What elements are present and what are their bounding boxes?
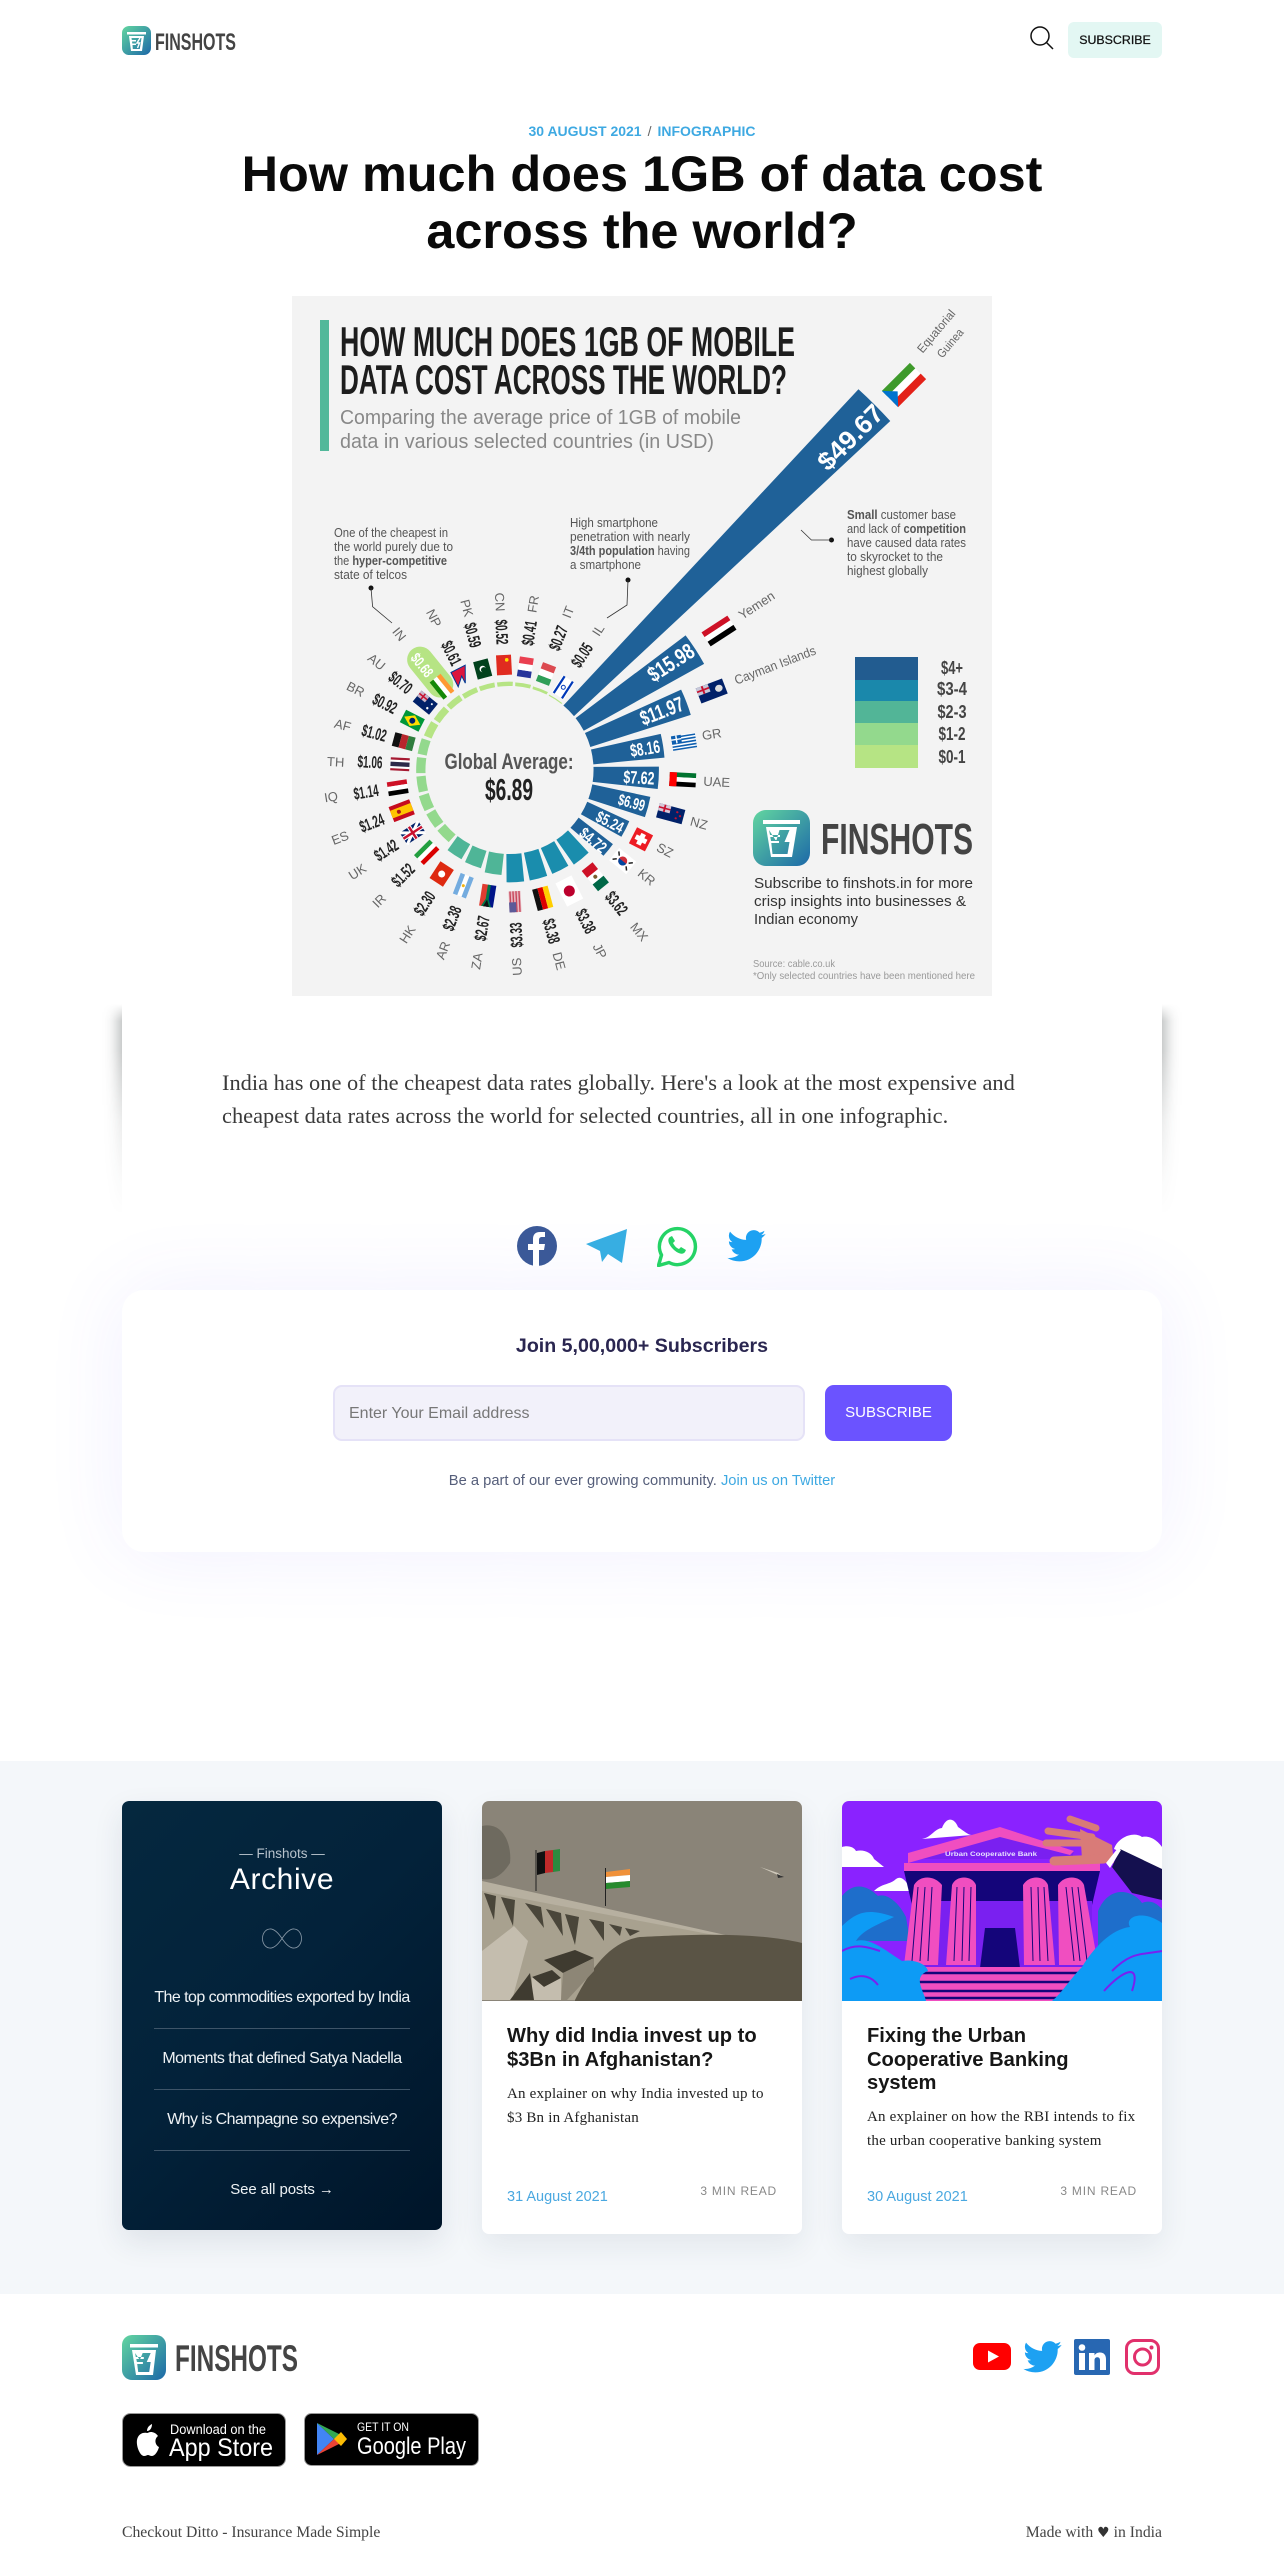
colour legend: $0-1 <box>938 747 966 767</box>
country values <box>352 619 631 948</box>
country labels: GR <box>701 725 723 743</box>
country labels: ES <box>329 828 351 848</box>
country labels: NZ <box>689 814 709 833</box>
article title: across the world? <box>426 202 858 259</box>
illustration: dam with flags <box>482 1801 802 2001</box>
country labels: UAE <box>703 774 731 790</box>
subscribe button <box>825 1385 952 1441</box>
infographic: cost of 1GB of mobile data <box>292 296 992 996</box>
country labels: Cayman Islands <box>732 643 818 688</box>
global average: Global Average: <box>444 749 574 774</box>
values inside bars: $49.67 <box>811 398 889 476</box>
article intro text: India has one of the cheapest data rates globally. Here's a look at the most expensive and <box>222 1070 1015 1095</box>
panel: archive card <box>122 1801 442 2230</box>
post summary <box>507 2086 764 2126</box>
colour legend: $4+ <box>941 658 963 678</box>
header subscribe button: SUBSCRIBE <box>1079 33 1151 47</box>
see all posts link: See all posts → <box>230 2181 334 2198</box>
archive heading: Archive <box>230 1863 334 1896</box>
footer left link: Checkout Ditto - Insurance Made Simple <box>122 2524 380 2541</box>
country labels: IT <box>559 604 577 620</box>
infographic source <box>753 958 975 982</box>
country values: $0.70 <box>385 668 416 698</box>
country labels: IR <box>369 891 389 911</box>
infographic subtitle: Comparing the average price of 1GB of mobile <box>340 407 741 429</box>
post title <box>507 2025 757 2070</box>
country values: $3.62 <box>601 888 631 919</box>
post summary: An explainer on why India invested up to <box>507 2086 764 2102</box>
values inside bars: $15.98 <box>643 638 699 687</box>
badge: app store: Download on the <box>170 2422 266 2437</box>
post meta date and tag: 30 AUGUST 2021 / INFOGRAPHIC <box>528 123 755 139</box>
post title: Fixing the Urban <box>867 2025 1026 2047</box>
badge: google play: GET IT ON <box>357 2420 409 2434</box>
subscribe button: SUBSCRIBE <box>845 1404 932 1421</box>
country labels: JP <box>590 941 610 961</box>
infographic subtitle: data in various selected countries (in USD) <box>340 431 714 453</box>
annotation: Israel: a smartphone <box>570 558 641 572</box>
country labels: AR <box>433 939 453 961</box>
country labels: SZ <box>654 840 676 861</box>
colour legend <box>855 657 967 768</box>
colour legend: $3-4 <box>937 679 967 699</box>
country labels: UK <box>346 860 369 883</box>
icon: instagram <box>1125 2339 1160 2375</box>
values inside bars: $7.62 <box>623 767 655 789</box>
annotation: India <box>334 526 453 623</box>
annotation: India: state of telcos <box>334 568 407 582</box>
icon: telegram <box>586 1229 627 1263</box>
annotation: Equatorial Guinea: Small customer base <box>847 508 956 522</box>
country labels <box>323 307 967 976</box>
archive list item 3: Why is Champagne so expensive? <box>167 2111 397 2128</box>
post summary: the urban cooperative banking system <box>867 2133 1102 2149</box>
country labels: PK <box>457 598 476 619</box>
country values: $1.02 <box>360 721 389 746</box>
country values: $0.92 <box>369 690 400 718</box>
infographic call to action <box>754 875 973 928</box>
infographic accent bar <box>320 320 329 451</box>
icon: twitter <box>728 1230 766 1262</box>
global average <box>444 749 574 807</box>
header logo <box>122 26 236 56</box>
country values: $1.14 <box>352 781 380 804</box>
country values: $0.52 <box>491 619 512 645</box>
country labels: ZA <box>468 951 486 970</box>
infographic call to action: Subscribe to finshots.in for more <box>754 875 973 892</box>
badge: google play <box>304 2413 479 2466</box>
icon: linkedin <box>1074 2339 1110 2375</box>
country labels: IL <box>589 621 607 639</box>
post summary: $3 Bn in Afghanistan <box>507 2110 639 2126</box>
email input <box>333 1385 805 1441</box>
annotation: Israel: penetration with nearly <box>570 530 691 544</box>
country labels: FR <box>524 594 542 614</box>
country values: $0.61 <box>437 638 465 669</box>
values inside bars: $0.68 <box>407 650 436 681</box>
archive list item 2: Moments that defined Satya Nadella <box>162 2050 402 2067</box>
country labels: DE <box>550 950 569 972</box>
article intro text <box>222 1070 1015 1128</box>
badge: app store: App Store <box>169 2434 273 2462</box>
country labels: IN <box>389 624 409 644</box>
country values: $0.27 <box>545 623 572 653</box>
post summary <box>867 2109 1135 2149</box>
country values: $2.67 <box>471 915 494 942</box>
annotation: India: the world purely due to <box>334 540 453 554</box>
radial bar chart <box>402 389 891 883</box>
post title <box>867 2025 1069 2094</box>
article intro text: cheapest data rates across the world for selected countries, all in one infographic. <box>222 1103 948 1128</box>
footer logo <box>122 2335 298 2380</box>
annotation: India: One of the cheapest in <box>334 526 448 540</box>
country labels: Equatorial <box>914 307 958 356</box>
annotation: Israel: 3/4th population having <box>570 544 690 558</box>
country values: $3.38 <box>539 917 564 946</box>
country values: $3.33 <box>506 922 527 948</box>
archive list item 1: The top commodities exported by India <box>154 1989 410 2006</box>
icon: infinity <box>262 1928 302 1948</box>
country labels: CN <box>492 592 508 612</box>
post title: Cooperative Banking <box>867 2048 1069 2070</box>
infographic subtitle <box>340 407 741 453</box>
email input: Enter Your Email address <box>349 1405 530 1422</box>
country values: $1.52 <box>388 860 419 891</box>
post title: Why did India invest up to <box>507 2025 757 2047</box>
values inside bars: $4.72 <box>576 825 610 857</box>
community note: Be a part of our ever growing community. Join us on Twitter <box>449 1473 835 1489</box>
illustration: cooperative bank building <box>842 1801 1162 2001</box>
illustration: cooperative bank building: Urban Cooperative Bank <box>945 1851 1037 1858</box>
search icon <box>1030 26 1054 50</box>
country labels: IQ <box>323 788 339 805</box>
global average: $6.89 <box>485 772 533 807</box>
archive kicker: — Finshots — <box>239 1846 325 1861</box>
country labels: KR <box>635 866 658 889</box>
country values: $2.38 <box>439 903 466 934</box>
values inside bars: $11.97 <box>637 693 687 730</box>
country values: $3.38 <box>571 906 600 937</box>
country labels: MX <box>627 920 651 944</box>
values inside bars <box>407 398 889 857</box>
country values: $2.30 <box>410 888 440 919</box>
post read time: 3 MIN READ <box>1060 2184 1137 2198</box>
post date: 31 August 2021 <box>507 2189 608 2205</box>
country labels: TH <box>327 754 345 770</box>
country labels: Guinea <box>934 325 967 361</box>
icon: twitter <box>1024 2341 1062 2372</box>
post date: 30 August 2021 <box>867 2189 968 2205</box>
article title <box>242 145 1042 259</box>
article title: How much does 1GB of data cost <box>242 145 1042 202</box>
colour legend: $1-2 <box>938 724 966 744</box>
country values: $0.41 <box>518 619 541 647</box>
country values: $1.06 <box>357 752 383 772</box>
values inside bars: $6.99 <box>616 792 647 815</box>
country values: $1.24 <box>357 810 387 837</box>
country flags <box>387 363 926 912</box>
post read time: 3 MIN READ <box>700 2184 777 2198</box>
subscribe heading: Join 5,00,000+ Subscribers <box>516 1335 768 1357</box>
panel: post card Afghanistan <box>482 1801 802 2234</box>
badge: app store <box>122 2413 286 2467</box>
country values: $0.05 <box>567 640 597 671</box>
country labels: BR <box>344 678 367 700</box>
annotation: India: the hyper-competitive <box>334 554 447 568</box>
icon: facebook <box>517 1226 557 1266</box>
infographic source: *Only selected countries have been mentioned here <box>753 970 975 982</box>
panel: article body <box>110 1007 1174 1164</box>
panel: post card Urban Cooperative Banking <box>842 1801 1162 2234</box>
annotation: Israel <box>570 516 691 618</box>
country labels: AF <box>333 716 353 735</box>
country labels: US <box>509 957 525 976</box>
country values: $1.42 <box>371 836 402 865</box>
annotation: Equatorial Guinea <box>801 508 966 578</box>
annotation: Equatorial Guinea: have caused data rates <box>847 536 966 550</box>
annotation: Equatorial Guinea: to skyrocket to the <box>847 550 943 564</box>
country labels: NP <box>423 607 445 630</box>
values inside bars: $5.24 <box>593 809 626 837</box>
post title: $3Bn in Afghanistan? <box>507 2048 713 2070</box>
header subscribe button <box>1068 22 1162 58</box>
annotation: Equatorial Guinea: highest globally <box>847 564 929 578</box>
colour legend: $2-3 <box>938 702 966 722</box>
panel: related posts section background <box>0 1761 1284 2294</box>
post summary: An explainer on how the RBI intends to fix <box>867 2109 1135 2125</box>
country labels: Yemen <box>736 588 777 622</box>
infographic call to action: Indian economy <box>754 911 858 928</box>
footer right note: Made with ♥ in India <box>1026 2524 1162 2541</box>
infographic call to action: crisp insights into businesses & <box>754 893 966 910</box>
country values: $0.59 <box>460 621 485 650</box>
infographic heading <box>340 318 795 403</box>
infographic finshots logo <box>753 810 973 866</box>
post title: system <box>867 2072 936 2094</box>
values inside bars: $8.16 <box>629 737 661 761</box>
annotation: Israel: High smartphone <box>570 516 658 530</box>
panel: subscribe card <box>122 1290 1162 1552</box>
infographic source: Source: cable.co.uk <box>753 958 836 970</box>
annotation: Equatorial Guinea: and lack of competition <box>847 522 966 536</box>
icon: whatsapp <box>657 1226 698 1267</box>
icon: youtube <box>973 2343 1011 2370</box>
country labels: AU <box>365 650 388 673</box>
country labels: HK <box>396 922 419 946</box>
